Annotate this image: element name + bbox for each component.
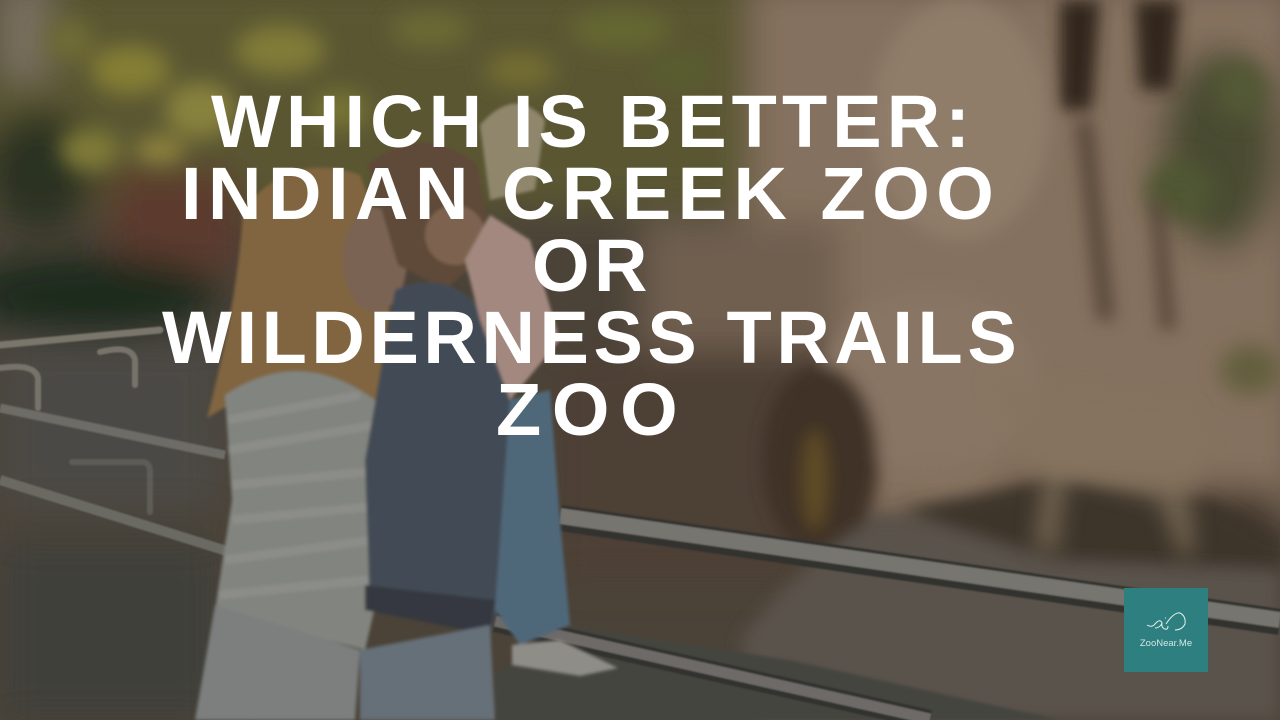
logo text: ZooNear.Me bbox=[1140, 638, 1192, 649]
title: WHICH IS BETTER: bbox=[211, 80, 975, 163]
title bbox=[162, 80, 1021, 451]
icon: elephant line drawing bbox=[1146, 612, 1186, 630]
title: WILDERNESS TRAILS bbox=[162, 296, 1021, 379]
people bbox=[195, 104, 618, 720]
upper fence bbox=[0, 330, 160, 512]
foliage bbox=[45, 10, 1280, 395]
wolf bbox=[990, 380, 1205, 560]
title: ZOO bbox=[496, 368, 688, 451]
rock wall streaks bbox=[740, 0, 1280, 720]
title: INDIAN CREEK ZOO bbox=[181, 152, 1000, 235]
logo badge bbox=[1124, 588, 1208, 672]
title: OR bbox=[532, 224, 652, 307]
railings bbox=[0, 408, 1280, 720]
